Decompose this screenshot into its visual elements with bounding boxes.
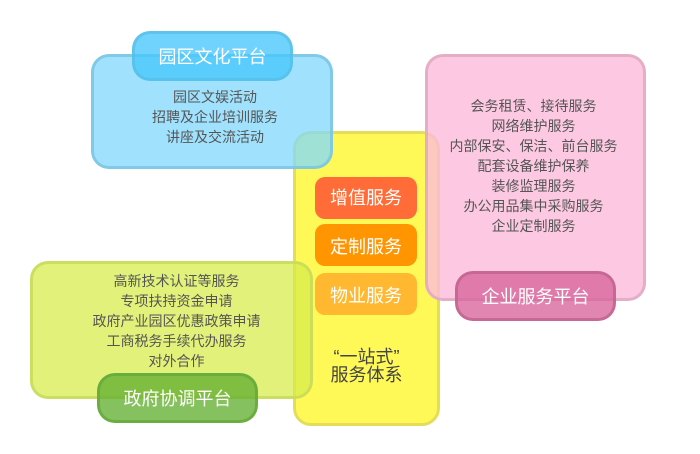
title: enterprise service platform — [455, 271, 616, 321]
list: enterprise services — [450, 98, 618, 234]
list: government services: 工商税务手续代办服务 — [106, 333, 246, 349]
list: enterprise services: 配套设备维护保养 — [478, 158, 590, 174]
list: government services: 高新技术认证等服务 — [114, 273, 240, 289]
title: enterprise service platform: 企业服务平台 — [482, 287, 590, 307]
title: government coordination platform: 政府协调平台 — [124, 389, 232, 409]
panel: government coordination — [30, 261, 313, 399]
list: enterprise services: 内部保安、保洁、前台服务 — [450, 138, 618, 154]
title: park culture platform: 园区文化平台 — [158, 47, 266, 67]
list: government services — [92, 273, 260, 369]
panel: one-stop service system — [293, 131, 440, 426]
list: park culture services — [152, 89, 278, 145]
panel: park culture — [91, 54, 333, 169]
list: park culture services: 讲座及交流活动 — [166, 129, 264, 145]
button: value-added services — [315, 177, 417, 219]
list: enterprise services: 会务租赁、接待服务 — [470, 98, 596, 114]
caption: one-stop service system — [330, 347, 402, 385]
list: government services: 专项扶持资金申请 — [120, 293, 232, 309]
button: property services — [315, 273, 417, 315]
title: government coordination platform — [97, 373, 258, 423]
list: enterprise services: 办公用品集中采购服务 — [464, 198, 604, 214]
button: custom services: 定制服务 — [330, 237, 402, 257]
button: custom services — [315, 224, 417, 266]
button: value-added services: 增值服务 — [330, 188, 402, 208]
caption: one-stop service system: 服务体系 — [330, 365, 402, 385]
list: enterprise services: 网络维护服务 — [492, 118, 576, 134]
title: park culture platform — [132, 31, 293, 81]
list: government services: 对外合作 — [148, 353, 204, 369]
list: park culture services: 招聘及企业培训服务 — [152, 109, 278, 125]
list: enterprise services: 企业定制服务 — [492, 218, 576, 234]
list: government services: 政府产业园区优惠政策申请 — [92, 313, 260, 329]
list: park culture services: 园区文娱活动 — [173, 89, 257, 105]
list: enterprise services: 装修监理服务 — [492, 178, 576, 194]
panel: enterprise services — [425, 54, 646, 301]
button: property services: 物业服务 — [330, 286, 402, 306]
caption: one-stop service system: “一站式” — [334, 347, 400, 367]
